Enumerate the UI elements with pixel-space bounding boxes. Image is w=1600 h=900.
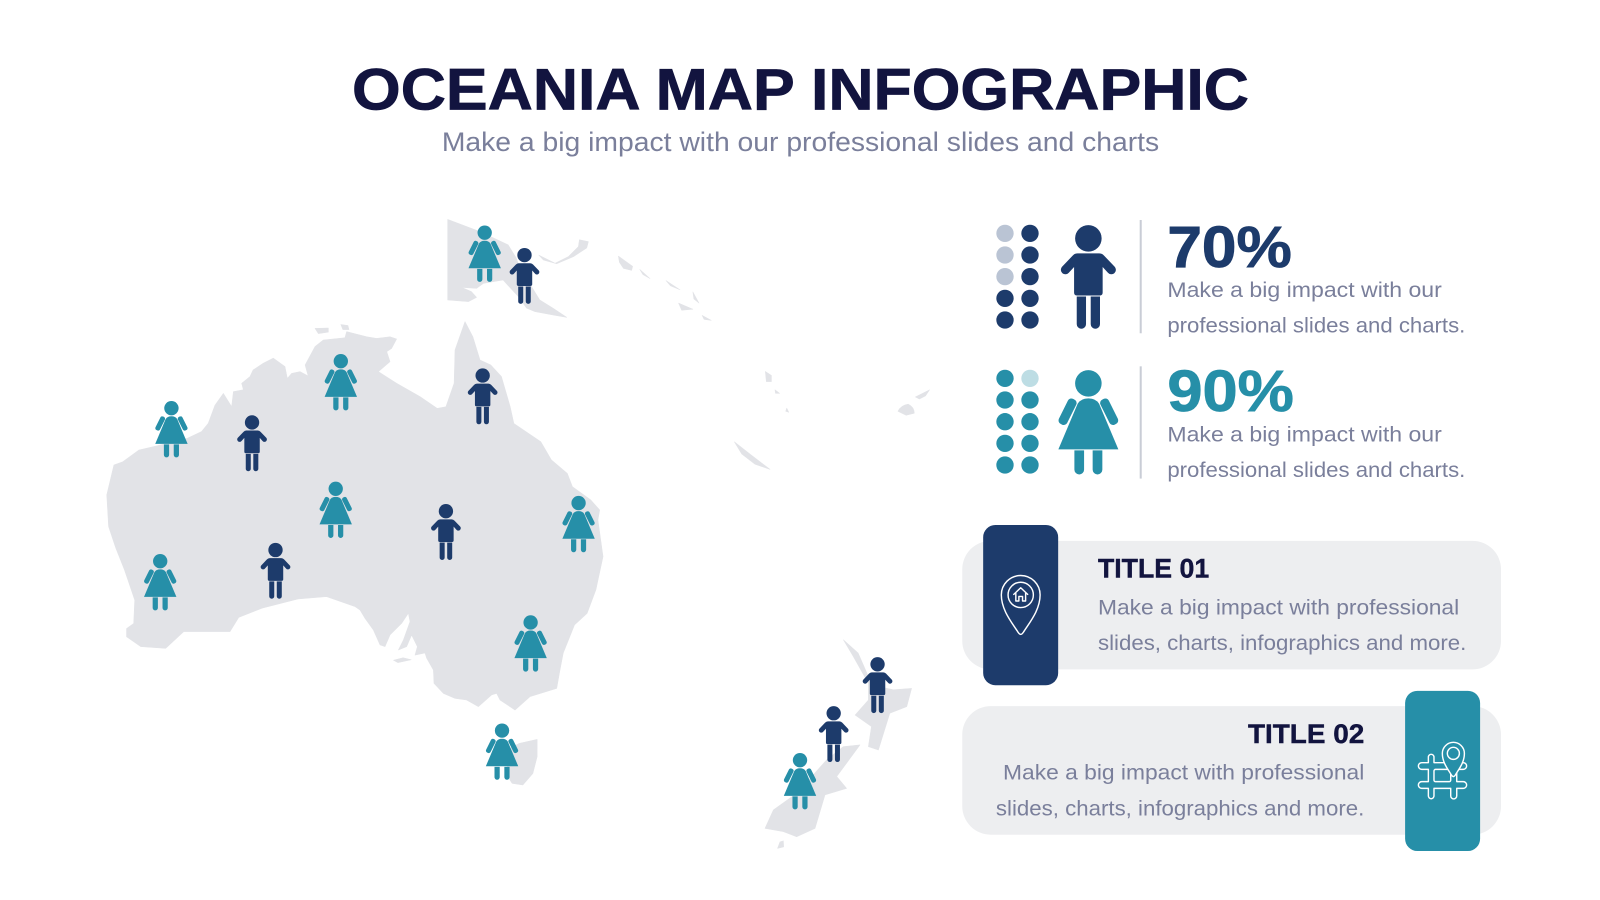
text: title 02 description: slides, charts, infographics and more. (996, 796, 1364, 820)
region: New Zealand North Island (843, 640, 912, 750)
card: title 01 (962, 525, 1501, 685)
icon tile: location home (983, 525, 1058, 685)
value: 70%: 70% (1167, 215, 1292, 280)
icon tile: map grid (1405, 691, 1480, 851)
text: title 01 description: Make a big impact with professional (1098, 595, 1459, 619)
marker: female central Australia (319, 482, 353, 538)
stat: 90 percent female (996, 359, 1465, 482)
text: 70 percent description: professional slides and charts. (1167, 314, 1465, 338)
region: Papua New Guinea (448, 219, 567, 317)
region: Tasmania (507, 739, 537, 785)
marker: male Western Australia north (237, 415, 267, 471)
text: 70 percent description: Make a big impact with our (1167, 278, 1442, 302)
text: 90 percent description (1167, 422, 1465, 482)
subtitle: Make a big impact with our professional slides and charts (442, 127, 1159, 157)
marker: female Western Australia south (143, 554, 177, 610)
islands: Solomon Islands (618, 256, 711, 320)
text: 70 percent description (1167, 278, 1465, 338)
island: New Caledonia (734, 442, 770, 469)
islands: Vanuatu (765, 371, 789, 412)
marker: female Papua (468, 225, 502, 282)
marker: female Queensland south (562, 496, 595, 552)
heading: title 01: TITLE 01 (1098, 554, 1209, 584)
text: title 02 description (996, 761, 1364, 820)
marker: male North Island (863, 657, 892, 713)
text: title 01 description (1098, 595, 1466, 655)
icon: map grid pin (1418, 742, 1467, 799)
map markers (143, 225, 892, 809)
value: 90%: 90% (1167, 359, 1294, 424)
marker: male central east Australia (431, 504, 461, 560)
marker: male Queensland north (468, 368, 498, 424)
marker: male South Australia west (261, 543, 290, 599)
text: title 01 description: slides, charts, infographics and more. (1098, 631, 1466, 655)
marker: male South Island north (819, 706, 849, 762)
text: title 02 description: Make a big impact with professional (1003, 761, 1364, 785)
marker: female Tasmania (485, 723, 519, 780)
text: 90 percent description: professional slides and charts. (1167, 458, 1465, 482)
card: title 02 (962, 691, 1501, 851)
text: 90 percent description: Make a big impact with our (1167, 422, 1442, 446)
icon: female figure (1057, 370, 1120, 474)
marker: female South Island south (783, 753, 817, 809)
island: Stewart Island (778, 841, 784, 848)
marker: male Papua (510, 248, 539, 304)
island: Kangaroo Island (393, 658, 411, 663)
islands: Fiji (898, 390, 930, 415)
dot grid: 90 percent (996, 370, 1039, 474)
dot grid: 70 percent (996, 225, 1039, 329)
marker: female New South Wales (514, 615, 547, 672)
region: New Zealand South Island (765, 745, 860, 837)
region: Australia mainland (107, 322, 603, 710)
stat: 70 percent male (996, 215, 1465, 338)
marker: female Northern Territory (324, 354, 358, 410)
icon: home pin (1001, 576, 1040, 634)
island: Tiwi Islands (315, 324, 349, 334)
title: OCEANIA MAP INFOGRAPHIC (352, 58, 1249, 123)
heading: title 02: TITLE 02 (1248, 719, 1364, 749)
marker: female Western Australia north (155, 401, 188, 457)
island: New Britain (539, 240, 588, 264)
icon: male figure (1061, 225, 1116, 329)
map: Oceania (107, 219, 930, 848)
